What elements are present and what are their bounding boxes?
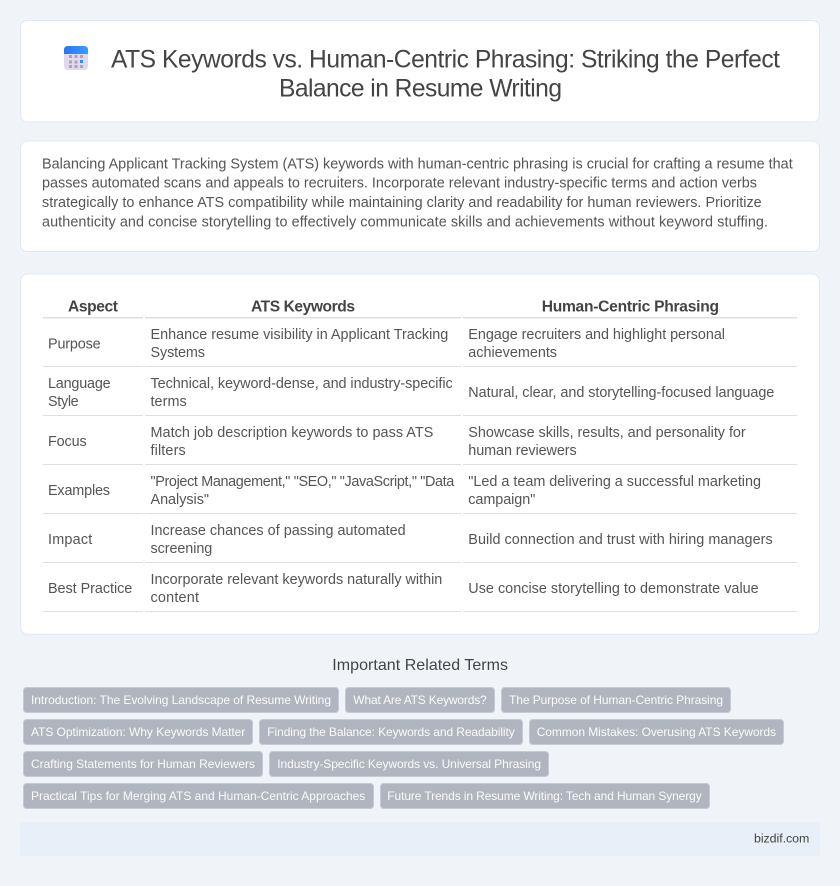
table header: ATS Keywords — [251, 299, 355, 316]
row: language style: Language — [48, 376, 111, 392]
row: best practice: Best Practice — [48, 581, 132, 597]
row: purpose: Enhance resume visibility in Applicant Tracking — [150, 327, 448, 343]
tag: Practical Tips for Merging ATS and Human-Centric Approaches — [31, 789, 365, 803]
tag: Introduction: The Evolving Landscape of Resume Writing — [31, 693, 331, 707]
row: examples — [43, 474, 797, 514]
row: language style — [43, 376, 797, 416]
row: best practice: Incorporate relevant keywords naturally within — [150, 572, 442, 588]
row: language style: Natural, clear, and storytelling-focused language — [468, 385, 774, 401]
row: purpose — [43, 327, 797, 367]
row: purpose: Engage recruiters and highlight personal — [468, 327, 725, 343]
title: ATS Keywords vs. Human-Centric Phrasing: Striking the Perfect — [111, 46, 780, 74]
description text: strategically to enhance ATS compatibility while maintaining clarity and readability for human reviewers. Prioritize — [42, 195, 762, 211]
row: language style: Technical, keyword-dense, and industry-specific — [150, 376, 453, 392]
row: best practice — [43, 572, 797, 612]
row: language style: Style — [48, 394, 79, 410]
row: impact — [43, 523, 797, 563]
row: examples: Analysis" — [150, 492, 209, 508]
row: examples: "Led a team delivering a successful marketing — [468, 474, 761, 490]
row: purpose: Systems — [150, 345, 205, 361]
row: focus: Match job description keywords to pass ATS — [150, 425, 433, 441]
panel: title header — [20, 20, 820, 122]
row: purpose: Purpose — [48, 336, 101, 352]
row: focus: Showcase skills, results, and personality for — [468, 425, 746, 441]
row: purpose: achievements — [468, 345, 557, 361]
row: focus: Focus — [48, 434, 87, 450]
row: examples: "Project Management," "SEO," "JavaScript," "Data — [150, 474, 454, 490]
tag — [270, 752, 548, 776]
row: impact: Impact — [48, 532, 92, 548]
heading: important related terms: Important Related Terms — [332, 657, 508, 674]
row: impact: Build connection and trust with hiring managers — [468, 532, 773, 548]
tag — [260, 720, 522, 744]
row: focus: filters — [150, 443, 186, 459]
tag: Finding the Balance: Keywords and Readability — [267, 725, 515, 739]
table header — [43, 299, 797, 318]
panel: description — [20, 141, 820, 252]
description text: passes automated scans and appeals to recruiters. Incorporate relevant industry-specific terms and action verbs — [42, 176, 757, 192]
tag — [24, 752, 262, 776]
panel: comparison table — [20, 274, 820, 634]
row: focus: human reviewers — [468, 443, 577, 459]
title — [111, 46, 780, 103]
description text — [42, 156, 793, 230]
tag: The Purpose of Human-Centric Phrasing — [509, 693, 723, 707]
row: focus — [43, 425, 797, 465]
footer: bizdif.com — [754, 832, 809, 846]
tag: Future Trends in Resume Writing: Tech and Human Synergy — [387, 789, 702, 803]
table header: Human-Centric Phrasing — [542, 299, 719, 316]
row: examples: campaign" — [468, 492, 535, 508]
tag — [380, 784, 710, 808]
tag — [24, 784, 374, 808]
row: impact: screening — [150, 541, 212, 557]
tag — [502, 688, 730, 712]
footer — [20, 822, 820, 856]
table header: Aspect — [68, 299, 118, 316]
title: Balance in Resume Writing — [279, 76, 562, 103]
related term tags — [24, 688, 784, 808]
row: best practice: Use concise storytelling to demonstrate value — [468, 581, 759, 597]
tag: Common Mistakes: Overusing ATS Keywords — [537, 725, 776, 739]
tag: Industry-Specific Keywords vs. Universal Phrasing — [277, 757, 541, 771]
tag — [530, 720, 784, 744]
tag: What Are ATS Keywords? — [353, 693, 487, 707]
tag — [24, 688, 338, 712]
tag: Crafting Statements for Human Reviewers — [31, 757, 255, 771]
icon: calendar — [64, 46, 88, 70]
description text: authenticity and concise storytelling to effectively communicate skills and achievements without keyword stuffing. — [42, 214, 768, 230]
row: best practice: content — [150, 590, 199, 606]
tag — [24, 720, 252, 744]
description text: Balancing Applicant Tracking System (ATS) keywords with human-centric phrasing is crucial for crafting a resume that — [42, 156, 793, 172]
row: impact: Increase chances of passing automated — [150, 523, 406, 539]
tag: ATS Optimization: Why Keywords Matter — [31, 725, 245, 739]
row: language style: terms — [150, 394, 187, 410]
row: examples: Examples — [48, 483, 110, 499]
tag — [346, 688, 494, 712]
